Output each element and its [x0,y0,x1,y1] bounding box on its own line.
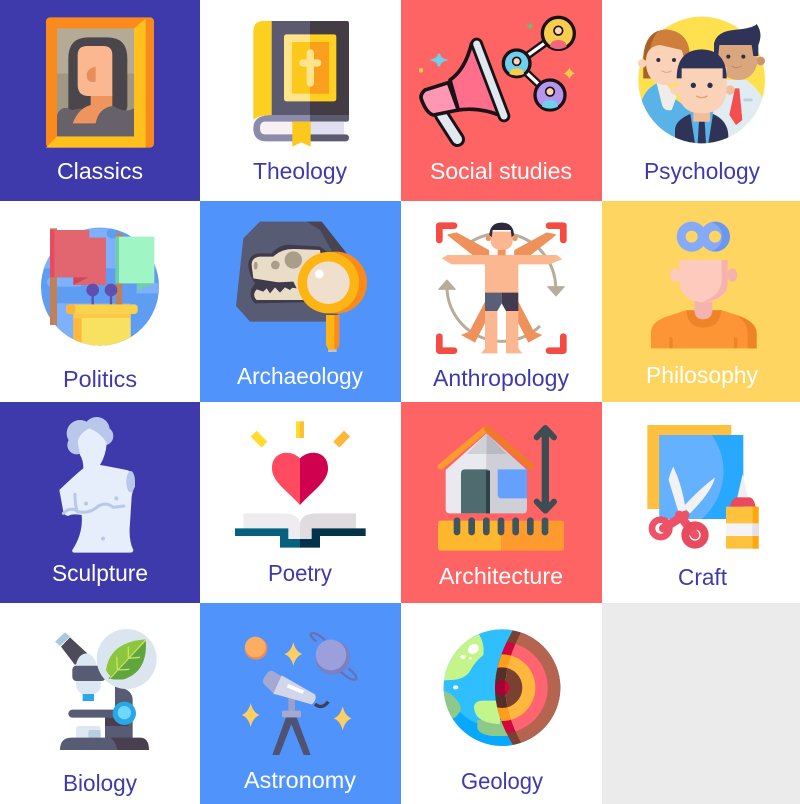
icon: holy book [253,21,349,147]
icon: flags and podium [40,228,163,347]
label: Geology [461,768,543,794]
panel: Craft [647,425,759,590]
icon: Venus statue [59,417,135,553]
icon: three people in a yellow circle [638,17,765,143]
tile background [401,402,602,603]
label: Anthropology [433,365,569,391]
icon: Vitruvian man [439,223,564,353]
tile background [200,201,401,402]
panel: Architecture [401,402,602,603]
icon: house, ruler and height arrow [438,428,564,551]
label: Philosophy [646,362,758,388]
tile background [200,603,401,804]
panel: Theology [253,21,349,184]
panel: Geology [440,627,560,794]
icon: microscope and leaf [55,629,157,750]
panel: Psychology [638,17,765,184]
tile background [0,0,200,201]
icon: earth cross-section [440,627,560,746]
label: Archaeology [237,363,363,389]
label: Poetry [268,560,332,586]
label: Social studies [430,158,572,184]
tile background [401,0,602,201]
panel: Philosophy [602,201,800,402]
panel: Biology [55,629,157,796]
icon: framed portrait [46,17,154,148]
label: Politics [63,366,137,392]
panel: Archaeology [200,201,401,402]
panel: Sculpture [0,402,200,603]
label: Classics [57,158,143,184]
panel: Social studies [401,0,602,201]
label: Theology [253,158,347,184]
tile background [602,201,800,402]
label: Psychology [644,158,760,184]
label: Biology [63,770,137,796]
icon: fossil and magnifying glass [236,222,367,352]
icon: head with infinity [651,222,757,348]
label: Craft [678,564,728,590]
label: Astronomy [244,767,356,793]
icon: telescope, planets and stars [242,633,356,755]
icon: paper, scissors and glue [647,425,759,549]
label: Sculpture [52,560,148,586]
panel: Classics [0,0,200,201]
panel: Astronomy [200,603,401,804]
panel: Anthropology [433,223,569,391]
panel: empty grey tile [602,603,800,804]
panel: Poetry [235,421,366,586]
icon: heart over open book [235,421,366,548]
label: Architecture [439,563,563,589]
icon: megaphone and network [419,17,575,139]
tile background [0,402,200,603]
panel: Politics [40,228,163,392]
